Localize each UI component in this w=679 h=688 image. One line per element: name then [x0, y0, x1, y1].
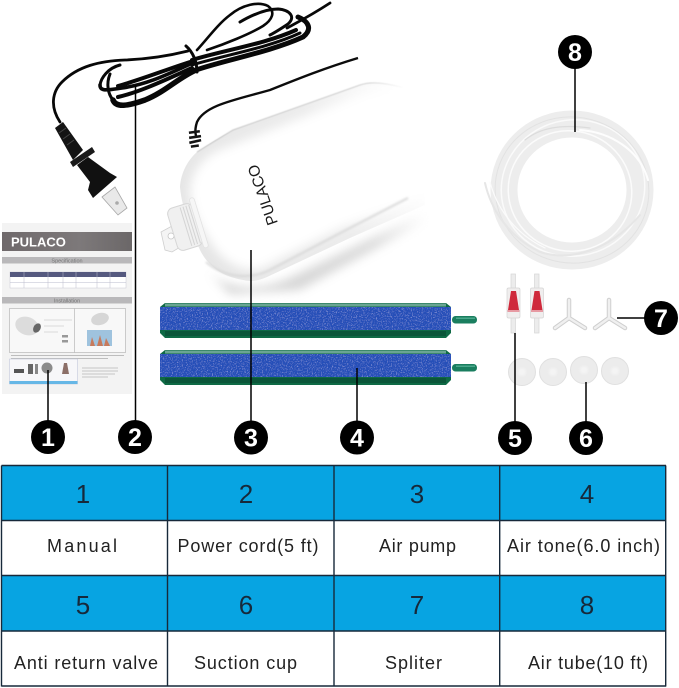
manual accessories strip [10, 359, 118, 384]
table labels: Power cord(5 ft) [178, 536, 318, 556]
badge 2: 2 [128, 424, 142, 452]
icon: air tube coil [483, 104, 661, 275]
pump body [180, 83, 425, 281]
table labels: Air tone(6.0 inch) [507, 536, 660, 556]
table numbers: 3 [410, 479, 424, 509]
table labels [14, 536, 660, 673]
badge 7 [644, 301, 678, 335]
badge 3 [234, 420, 268, 454]
pump shadow [205, 212, 425, 294]
icon: splitters [555, 300, 625, 328]
table numbers: 7 [410, 590, 424, 620]
table labels: Manual [47, 536, 117, 556]
installation section [2, 297, 132, 352]
manual header [2, 232, 132, 251]
valve 1 [507, 274, 520, 333]
splitter 1 [555, 300, 585, 328]
table numbers: 4 [580, 479, 594, 509]
brand text: PULACO [245, 162, 282, 227]
badge 4: 4 [350, 424, 364, 452]
icon: air pump [161, 58, 430, 294]
table header row 2 [2, 576, 666, 631]
pump tab [161, 226, 182, 252]
badge 8: 8 [568, 39, 582, 67]
table numbers: 8 [580, 590, 594, 620]
pump cord [195, 58, 358, 136]
callout: number badges [31, 35, 678, 455]
suction cup 1 [508, 358, 536, 386]
cord upper loop [197, 4, 272, 50]
icon: power cord [53, 3, 330, 122]
table numbers: 2 [239, 479, 253, 509]
table labels: Air tube(10 ft) [528, 653, 648, 673]
badge 3: 3 [244, 424, 258, 452]
cord band [186, 46, 197, 72]
suction cup 3 [570, 356, 598, 384]
table labels: Anti return valve [14, 653, 158, 673]
suction cup 4 [602, 358, 628, 384]
specification section [2, 257, 132, 288]
manual footnote text [11, 356, 124, 358]
table numbers: 6 [239, 590, 253, 620]
table labels: Suction cup [194, 653, 297, 673]
badge 1: 1 [41, 424, 55, 452]
icon: suction cups [508, 356, 628, 386]
leader lines [48, 68, 646, 422]
suction cup 2 [540, 358, 566, 386]
pump cord strain relief [188, 131, 202, 147]
badge 6 [569, 421, 603, 455]
badge 4 [340, 420, 374, 454]
cord bundle left loop [100, 62, 195, 90]
icon: anti return valves [507, 274, 544, 333]
icon: power plug [55, 122, 127, 215]
badge 6: 6 [579, 425, 593, 453]
badge 1 [31, 420, 65, 454]
badge 5: 5 [508, 425, 522, 453]
badge 8 [558, 35, 592, 69]
manual header: PULACO [11, 234, 66, 250]
table numbers: 5 [76, 590, 90, 620]
cord exit [287, 3, 330, 28]
valve 2 [530, 274, 544, 333]
cord to plug [53, 51, 188, 122]
splitter 2 [595, 300, 625, 328]
badge 2 [118, 420, 152, 454]
table grid [2, 466, 666, 686]
table header row 1 [2, 466, 666, 521]
installation section: Installation [54, 298, 80, 304]
parts table [2, 466, 666, 686]
table labels: Air pump [379, 536, 456, 556]
table numbers [76, 479, 594, 620]
table labels: Spliter [385, 653, 442, 673]
badge 5 [498, 421, 532, 455]
icon: air stone top [160, 303, 477, 338]
pump knob [165, 197, 209, 256]
icon: air stone bottom [160, 350, 477, 385]
cord second loop [240, 9, 292, 35]
table numbers: 1 [76, 479, 90, 509]
badge 7: 7 [654, 305, 668, 333]
cord bundle right [196, 17, 309, 70]
specification section: Specification [51, 258, 83, 264]
panel: manual [2, 223, 132, 394]
